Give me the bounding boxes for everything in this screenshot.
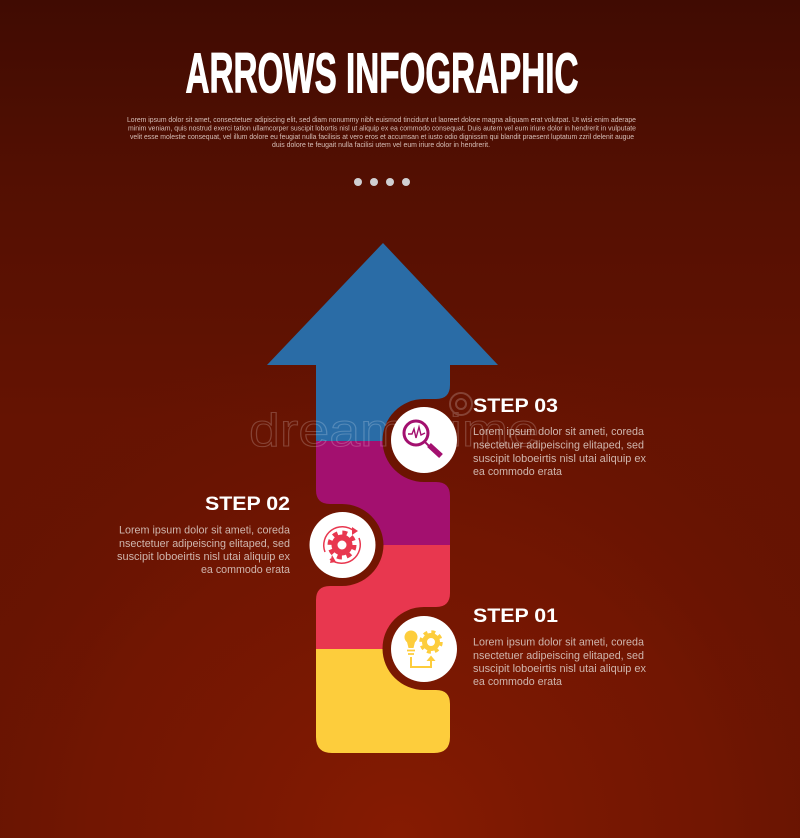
step 03 body: [473, 426, 646, 478]
step 02 body: nsectetuer adipeiscing elitaped, sed: [119, 538, 290, 550]
watermark: [249, 393, 539, 456]
step 03 body: Lorem ipsum dolor sit ameti, coreda: [473, 426, 645, 438]
icon: gear with cycle arrows, step 02: [310, 512, 376, 578]
watermark: dreamstime: [249, 404, 539, 456]
step 01 heading: STEP 01: [473, 605, 558, 627]
arrow segment: red: [316, 545, 450, 649]
intro text block: duis dolore te feugait nulla facilisi utem vel eum iriure dolor in hendrerit.: [272, 140, 490, 149]
step 02 body: [117, 524, 291, 576]
step 03 body: ea commodo erata: [473, 466, 563, 478]
pagination dots: [354, 178, 410, 186]
intro text block: Lorem ipsum dolor sit amet, consectetuer adipiscing elit, sed diam nonummy nibh euismod tincidunt ut laoreet dolore magna aliquam erat volutpat. Ut wisi enim aderape: [127, 115, 636, 124]
icon: bulb, gear and arrow, step 01: [391, 616, 457, 682]
step 03 text: [473, 395, 646, 478]
step 02 heading: STEP 02: [205, 493, 290, 515]
intro text block: velit esse molestie consequat, vel illum dolore eu feugiat nulla facilisis at vero eros et accumsan et iusto odio dignissim qui blandit praesent luptatum zzril delenit augue: [130, 132, 634, 141]
step 02 body: suscipit loboeirtis nisl utai aliquip ex: [117, 551, 290, 563]
step 01 text: [473, 605, 646, 688]
arrow: [267, 243, 498, 753]
step 01 body: [473, 636, 646, 688]
step 03 body: suscipit loboeirtis nisl utai aliquip ex: [473, 453, 646, 465]
step 01 body: Lorem ipsum dolor sit ameti, coreda: [473, 636, 645, 648]
step 03 heading: STEP 03: [473, 395, 558, 417]
intro text block: minim veniam, quis nostrud exerci tation ullamcorper suscipit lobortis nisl ut aliquip ex ea commodo consequat. Duis autem vel eum iriure dolor in hendrerit in vulputate: [128, 124, 636, 132]
step 03 body: nsectetuer adipeiscing elitaped, sed: [473, 440, 644, 452]
arrow segment: yellow base: [316, 649, 450, 753]
icon: magnifier with pulse, step 03: [391, 407, 457, 473]
arrow segment: magenta: [316, 441, 450, 545]
step 02 text: [117, 493, 291, 576]
step 01 body: nsectetuer adipeiscing elitaped, sed: [473, 650, 644, 662]
intro text block: [127, 115, 636, 149]
step 02 body: ea commodo erata: [201, 564, 291, 576]
arrow segment: blue head, step 03: [267, 243, 498, 441]
step 01 body: suscipit loboeirtis nisl utai aliquip ex: [473, 663, 646, 675]
step 02 body: Lorem ipsum dolor sit ameti, coreda: [119, 524, 291, 536]
step 01 body: ea commodo erata: [473, 676, 563, 688]
